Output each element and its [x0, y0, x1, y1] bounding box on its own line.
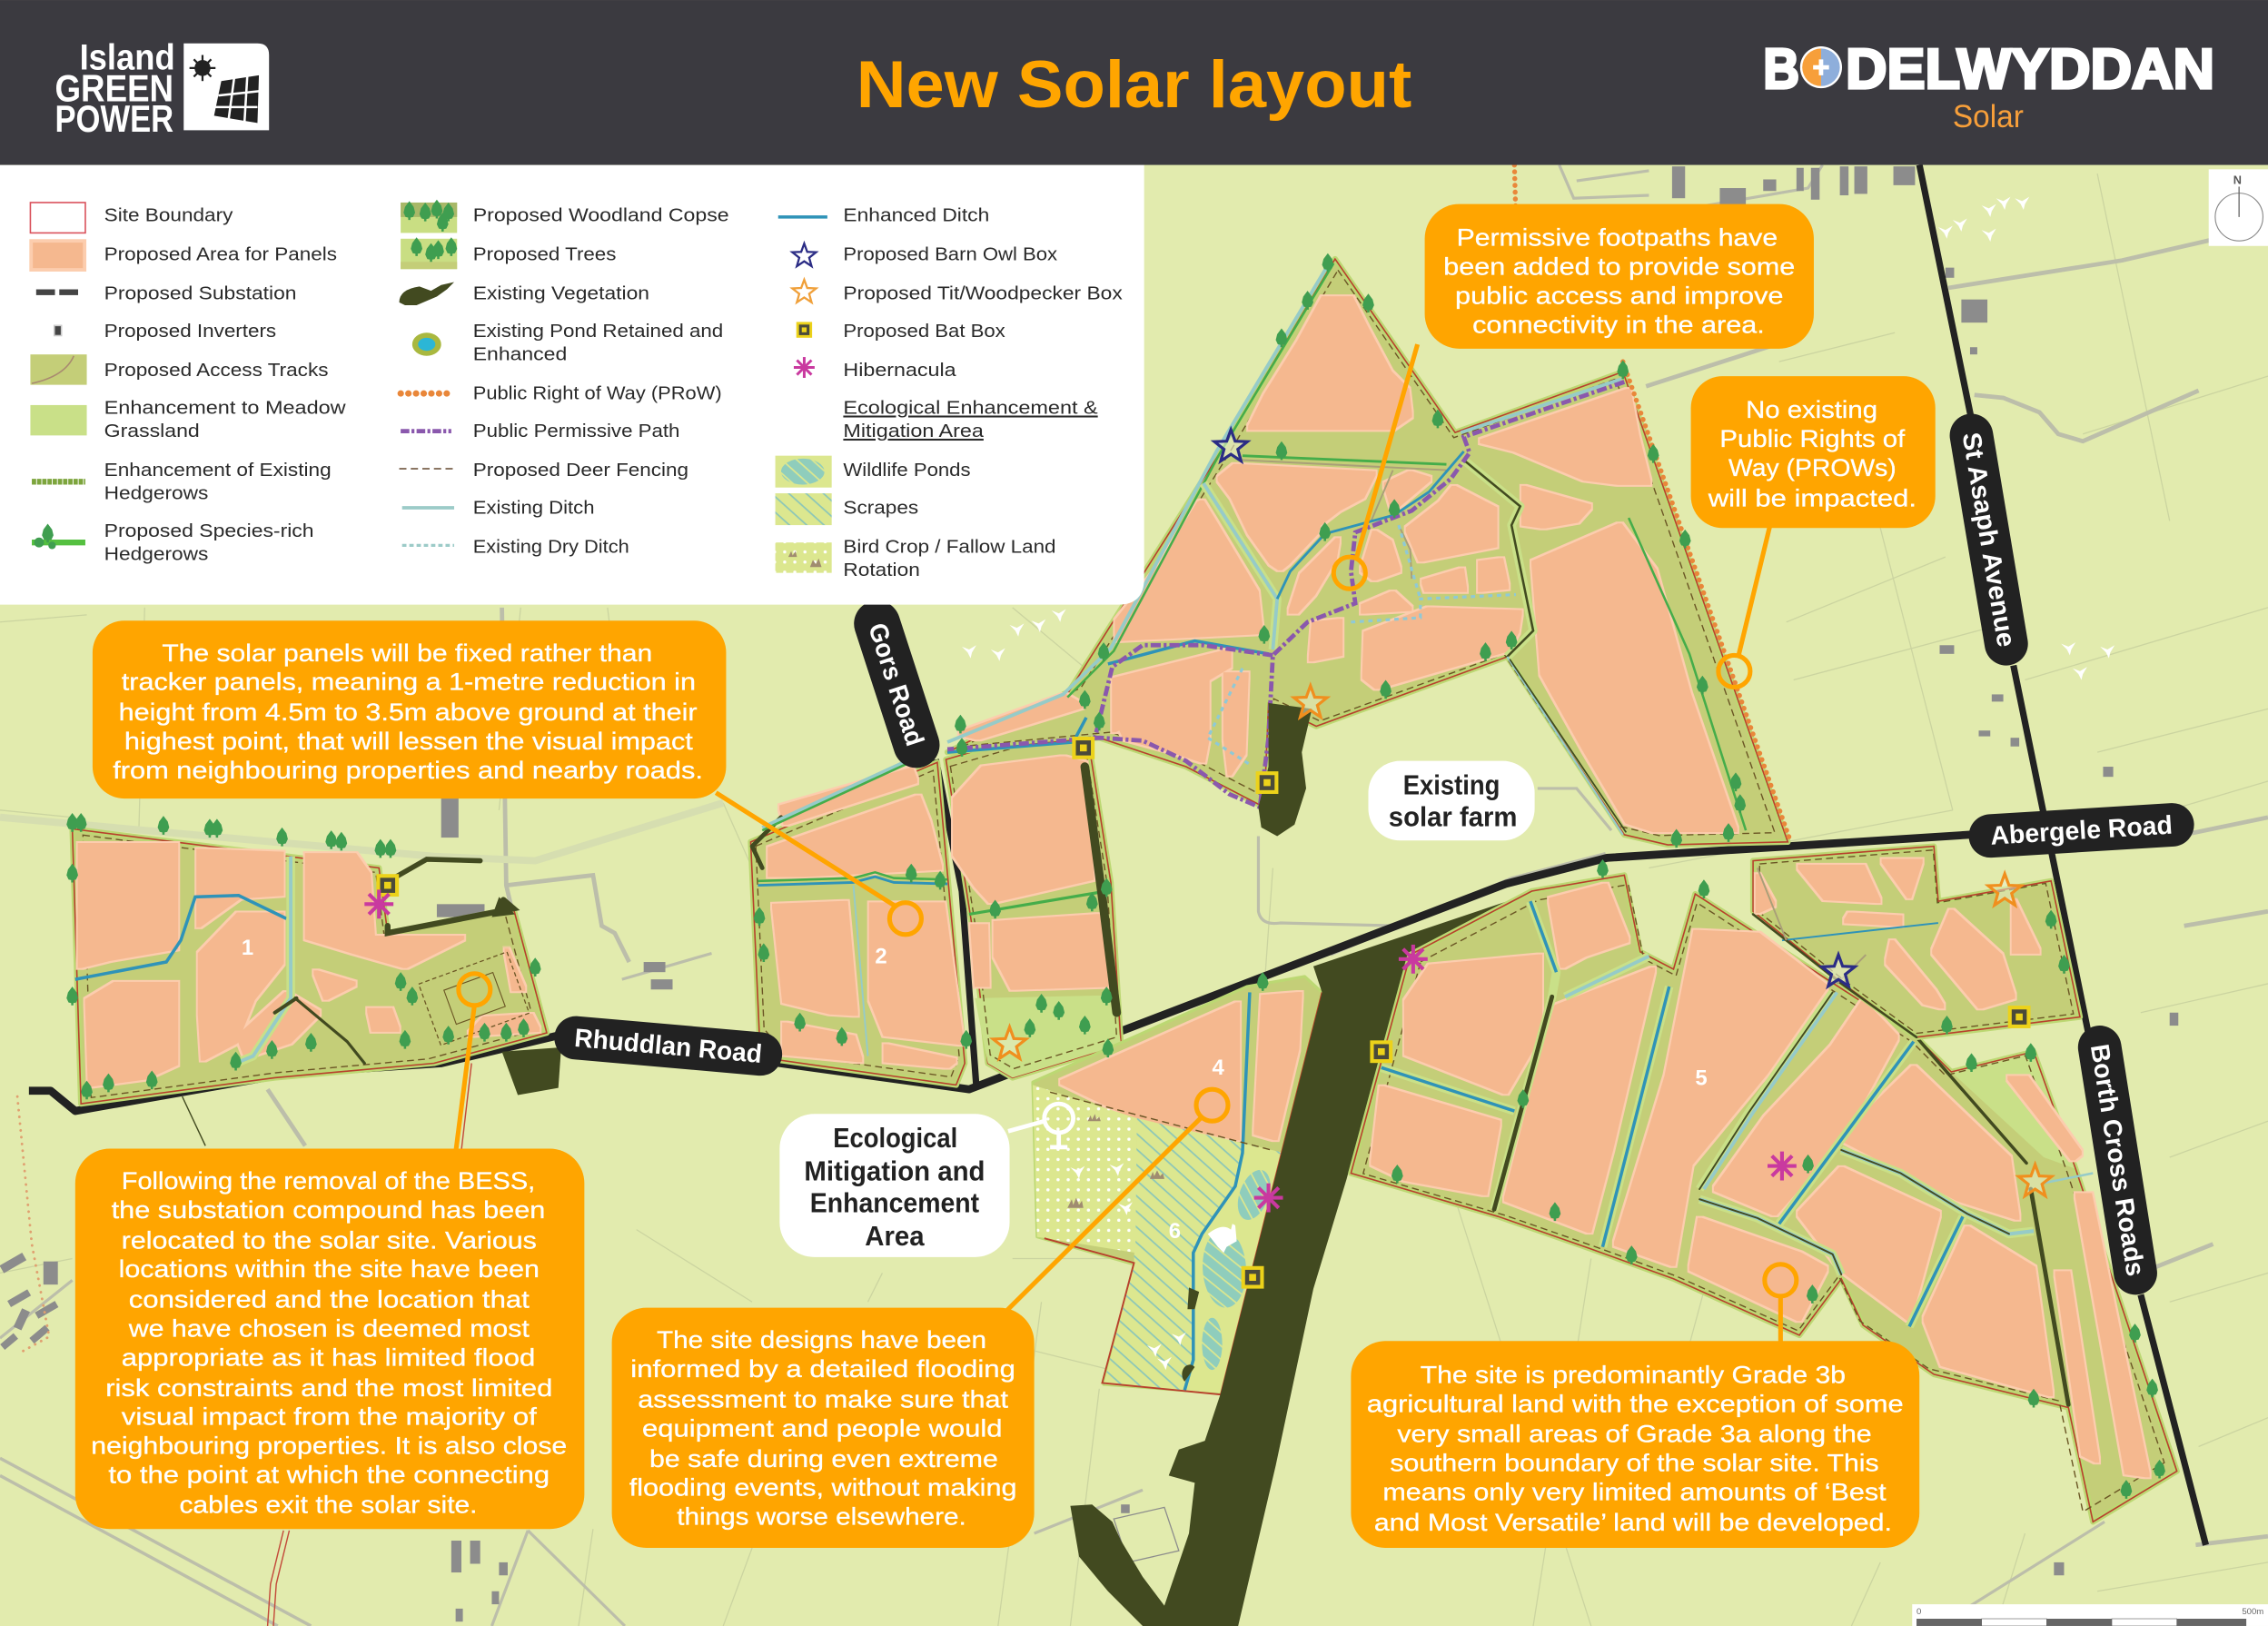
callout: substation relocation: cables exit the solar site. — [179, 1491, 478, 1519]
north-east site — [1753, 847, 2080, 1037]
callout: flooding assessment: The site designs have been — [657, 1325, 986, 1353]
callout: substation relocation: to the point at which the connecting — [108, 1460, 550, 1488]
callout: permissive footpaths — [1425, 204, 1814, 349]
callout: substation relocation: relocated to the solar site. Various — [122, 1225, 537, 1254]
scale bar: 0 — [1916, 1607, 1921, 1617]
road label: Rhuddlan Road: Rhuddlan Road — [573, 1024, 763, 1069]
panels: north-east site — [1758, 861, 2038, 1006]
wildlife ponds — [1201, 1165, 1276, 1370]
legend: proposed barn owl box — [792, 243, 1058, 266]
road label: Borth Cross Roads: Borth Cross Roads — [2085, 1042, 2150, 1278]
panels: site 4 — [1062, 994, 1301, 1138]
road label: Abergele Road: Abergele Road — [1989, 811, 2174, 851]
callout: public rights of way: Public Rights of — [1719, 424, 1906, 452]
callout: substation relocation — [75, 1148, 584, 1529]
callout: substation relocation: we have chosen is deemed most — [128, 1314, 530, 1342]
legend: existing dry ditch: Existing Dry Ditch — [473, 536, 629, 557]
icons: tit / woodpecker boxes — [993, 686, 2052, 1196]
callout: agricultural land grade: agricultural land with the exception of some — [1367, 1389, 1904, 1417]
logo: Island Green Power: GREEN — [55, 68, 173, 110]
legend panel — [0, 165, 1144, 605]
callout: agricultural land grade: southern boundary of the solar site. This — [1390, 1449, 1879, 1477]
callout: substation relocation: considered and the location that — [129, 1285, 530, 1314]
logo: Bodelwyddan Solar: DELWYDDAN — [1846, 38, 2214, 101]
legend: wildlife ponds: Wildlife Ponds — [843, 460, 971, 481]
callout: flooding assessment: assessment to make sure that — [638, 1385, 1008, 1413]
callout: flooding assessment: equipment and people would — [642, 1413, 1003, 1442]
site area numbers: 4 — [1212, 1056, 1224, 1080]
legend: proposed woodland copse: Proposed Woodland Copse — [473, 205, 729, 226]
label: ecological mitigation and enhancement area: Area — [865, 1222, 926, 1252]
callout: substation relocation: locations within the site have been — [119, 1254, 540, 1283]
panels: site 5 — [1372, 886, 2148, 1475]
legend: scrapes: Scrapes — [843, 497, 918, 518]
legend: bird crop / fallow land rotation — [776, 536, 1056, 580]
callout: flooding assessment: things worse elsewhere. — [677, 1502, 966, 1530]
header bar — [0, 0, 2268, 165]
logo: Island Green Power: POWER — [55, 98, 173, 140]
road label: St Asaph Avenue — [1946, 411, 2031, 669]
legend: proposed access tracks: Proposed Access Tracks — [104, 360, 328, 381]
label: ecological mitigation and enhancement area: Enhancement — [810, 1189, 979, 1219]
existing woodland belt — [1070, 894, 1529, 1626]
legend: existing pond retained and enhanced — [412, 321, 723, 365]
legend: ecological enhancement heading: Mitigation Area — [843, 421, 984, 441]
road label: Gors Road: Gors Road — [862, 620, 929, 749]
callout: substation relocation: neighbouring properties. It is also close — [91, 1431, 567, 1459]
label: ecological mitigation and enhancement area: Mitigation and — [804, 1156, 985, 1186]
ecological birds and plants — [1067, 1114, 1237, 1370]
callout: public rights of way — [1691, 376, 1936, 528]
plain wetland strip beside the ponds — [1184, 1143, 1286, 1393]
bird crop — [1033, 1085, 1137, 1253]
legend: hibernacula: Hibernacula — [843, 360, 956, 381]
callout: permissive footpaths: Permissive footpaths have — [1457, 223, 1778, 252]
callout leaders and rings — [456, 344, 1797, 1345]
PRoW routes and cable route — [17, 165, 1533, 1626]
callout: agricultural land grade: The site is predominantly Grade 3b — [1421, 1360, 1846, 1388]
callout: fixed solar panels: height from 4.5m to 3.5m above ground at their — [119, 698, 698, 726]
callout: fixed solar panels: highest point, that will lessen the visual impact — [124, 727, 693, 755]
legend: proposed area for panels — [31, 241, 337, 270]
legend: existing pond retained and enhanced: Enhanced — [473, 344, 567, 365]
trees and hedge markers — [66, 253, 2165, 1499]
legend: existing vegetation: Existing Vegetation — [473, 283, 649, 304]
site area numbers: 2 — [875, 945, 887, 969]
label: ecological mitigation and enhancement area — [779, 1114, 1010, 1257]
legend: proposed deer fencing: Proposed Deer Fencing — [473, 460, 688, 481]
panels: site 3 — [955, 758, 1106, 988]
legend: proposed species-rich hedgerows — [32, 521, 314, 564]
legend: enhancement to meadow grassland: Grassland — [104, 421, 200, 441]
panels: site 2 — [769, 769, 962, 1066]
callout: permissive footpaths: public access and improve — [1455, 281, 1784, 309]
callout: substation relocation: Following the removal of the BESS, — [122, 1166, 535, 1195]
site area numbers — [242, 936, 1708, 1244]
callout: public rights of way: will be impacted. — [1708, 483, 1916, 511]
legend: proposed trees — [401, 237, 616, 269]
legend: ecological enhancement heading: Ecological Enhancement & — [843, 397, 1098, 418]
callout: fixed solar panels — [93, 620, 726, 798]
legend: proposed species-rich hedgerows: Hedgerows — [104, 543, 208, 564]
legend: wildlife ponds — [776, 456, 971, 488]
road label: Gors Road — [848, 595, 946, 774]
label: existing solar farm: solar farm — [1389, 802, 1518, 832]
callout: public rights of way: Way (PROWs) — [1728, 453, 1897, 481]
callout: substation relocation: the substation compound has been — [112, 1195, 545, 1224]
icons: white birds — [962, 197, 2114, 679]
legend: ecological enhancement heading — [843, 397, 1098, 441]
callout: permissive footpaths: been added to provide some — [1443, 253, 1795, 281]
callout: substation relocation: visual impact from the majority of — [122, 1403, 537, 1431]
existing woodland block — [1258, 703, 1312, 836]
panels: northern site — [960, 298, 1736, 830]
callout: flooding assessment: flooding events, without making — [629, 1473, 1017, 1502]
logo: Island Green Power — [55, 37, 269, 140]
scale bar — [1912, 1604, 2268, 1626]
meadow strip — [1951, 1052, 2075, 1169]
scale bar: 500m — [2242, 1607, 2263, 1617]
legend: enhancement to meadow grassland: Enhancement to Meadow — [104, 397, 346, 418]
legend: proposed area for panels: Proposed Area for Panels — [104, 244, 337, 265]
legend: hibernacula — [794, 357, 956, 381]
legend: proposed bat box: Proposed Bat Box — [843, 321, 1005, 342]
northern site — [947, 259, 1790, 845]
site 2 — [750, 752, 965, 1085]
existing woodland block by Rhuddlan Road — [502, 1047, 561, 1096]
southern site 5 — [1351, 875, 2177, 1522]
legend: site boundary: Site Boundary — [104, 205, 233, 226]
north arrow — [2209, 169, 2268, 246]
panels: site 1 — [80, 845, 538, 1085]
callout: fixed solar panels: tracker panels, meaning a 1-metre reduction in — [122, 668, 696, 696]
title: New Solar layout — [857, 47, 1411, 122]
site 3 — [946, 719, 1121, 1077]
logo: Island Green Power: Island — [80, 37, 175, 77]
site area numbers: 6 — [1169, 1219, 1181, 1244]
scrapes — [1104, 1118, 1284, 1393]
road label: Rhuddlan Road — [552, 1015, 784, 1077]
legend: proposed access tracks — [30, 354, 328, 385]
legend: site boundary — [30, 203, 233, 233]
callout: flooding assessment: informed by a detailed flooding — [630, 1354, 1015, 1383]
site 1 — [73, 829, 547, 1104]
site area numbers: 5 — [1695, 1066, 1708, 1090]
icons: hibernacula — [364, 889, 1797, 1213]
icons: barn owl boxes — [1214, 430, 1855, 987]
legend: existing vegetation — [400, 283, 649, 305]
legend: proposed substation: Proposed Substation — [104, 283, 296, 304]
label: ecological mitigation and enhancement area: Ecological — [833, 1124, 957, 1154]
callout: fixed solar panels: from neighbouring properties and nearby roads. — [113, 756, 703, 784]
callout: agricultural land grade: and Most Versatile’ land will be developed. — [1374, 1508, 1892, 1536]
north arrow: N — [2233, 173, 2242, 186]
legend: proposed substation — [36, 283, 296, 304]
legend: public right of way: Public Right of Way (PRoW) — [473, 383, 722, 404]
callout: public rights of way: No existing — [1746, 395, 1877, 423]
legend: proposed tit/woodpecker box: Proposed Tit/Woodpecker Box — [843, 283, 1123, 304]
callout: flooding assessment — [612, 1308, 1035, 1548]
road label: Borth Cross Roads — [2075, 1023, 2160, 1298]
legend: enhancement of existing hedgerows: Enhancement of Existing — [104, 460, 332, 481]
callout: permissive footpaths: connectivity in the area. — [1472, 310, 1765, 338]
legend: enhanced ditch: Enhanced Ditch — [843, 205, 989, 226]
road label: Abergele Road — [1967, 802, 2195, 859]
logo: Bodelwyddan Solar: Solar — [1953, 99, 2024, 134]
legend: proposed barn owl box: Proposed Barn Owl Box — [843, 244, 1058, 265]
legend: bird crop / fallow land rotation: Bird Crop / Fallow Land — [843, 536, 1056, 557]
legend: existing pond retained and enhanced: Existing Pond Retained and — [473, 321, 723, 342]
logo: Bodelwyddan Solar: B — [1763, 38, 1799, 101]
legend: public permissive path: Public Permissive Path — [473, 421, 679, 441]
callout: agricultural land grade: means only very limited amounts of ‘Best — [1382, 1477, 1887, 1505]
legend: enhancement of existing hedgerows — [32, 460, 332, 503]
callout: agricultural land grade: very small areas of Grade 3a along the — [1397, 1420, 1872, 1448]
legend: bird crop / fallow land rotation: Rotation — [843, 560, 920, 580]
road label: St Asaph Avenue: St Asaph Avenue — [1956, 431, 2021, 649]
callout: agricultural land grade — [1351, 1341, 1919, 1548]
callout: substation relocation: appropriate as it has limited flood — [122, 1343, 535, 1371]
legend: existing ditch: Existing Ditch — [473, 497, 595, 518]
legend: proposed inverters: Proposed Inverters — [104, 321, 276, 342]
legend: proposed trees: Proposed Trees — [473, 244, 616, 265]
callout: fixed solar panels: The solar panels will be fixed rather than — [162, 639, 652, 667]
meadow area with trees — [975, 996, 1121, 1077]
label: existing solar farm — [1368, 761, 1535, 840]
logo: Bodelwyddan Solar — [1763, 38, 2214, 134]
callout: flooding assessment: be safe during even extreme — [649, 1444, 998, 1472]
legend: proposed woodland copse — [401, 200, 729, 233]
site 4 and ecological area 6 — [1033, 977, 1322, 1394]
site area numbers: 1 — [242, 936, 253, 960]
legend: enhancement to meadow grassland — [30, 397, 346, 441]
icons: bat boxes — [378, 739, 2028, 1287]
legend: scrapes — [776, 493, 918, 525]
legend: proposed tit/woodpecker box — [792, 280, 1123, 304]
callout: substation relocation: risk constraints and the most limited — [105, 1373, 552, 1402]
legend: enhancement of existing hedgerows: Hedgerows — [104, 482, 208, 503]
legend: proposed species-rich hedgerows: Proposed Species-rich — [104, 521, 314, 541]
label: existing solar farm: Existing — [1403, 770, 1500, 800]
